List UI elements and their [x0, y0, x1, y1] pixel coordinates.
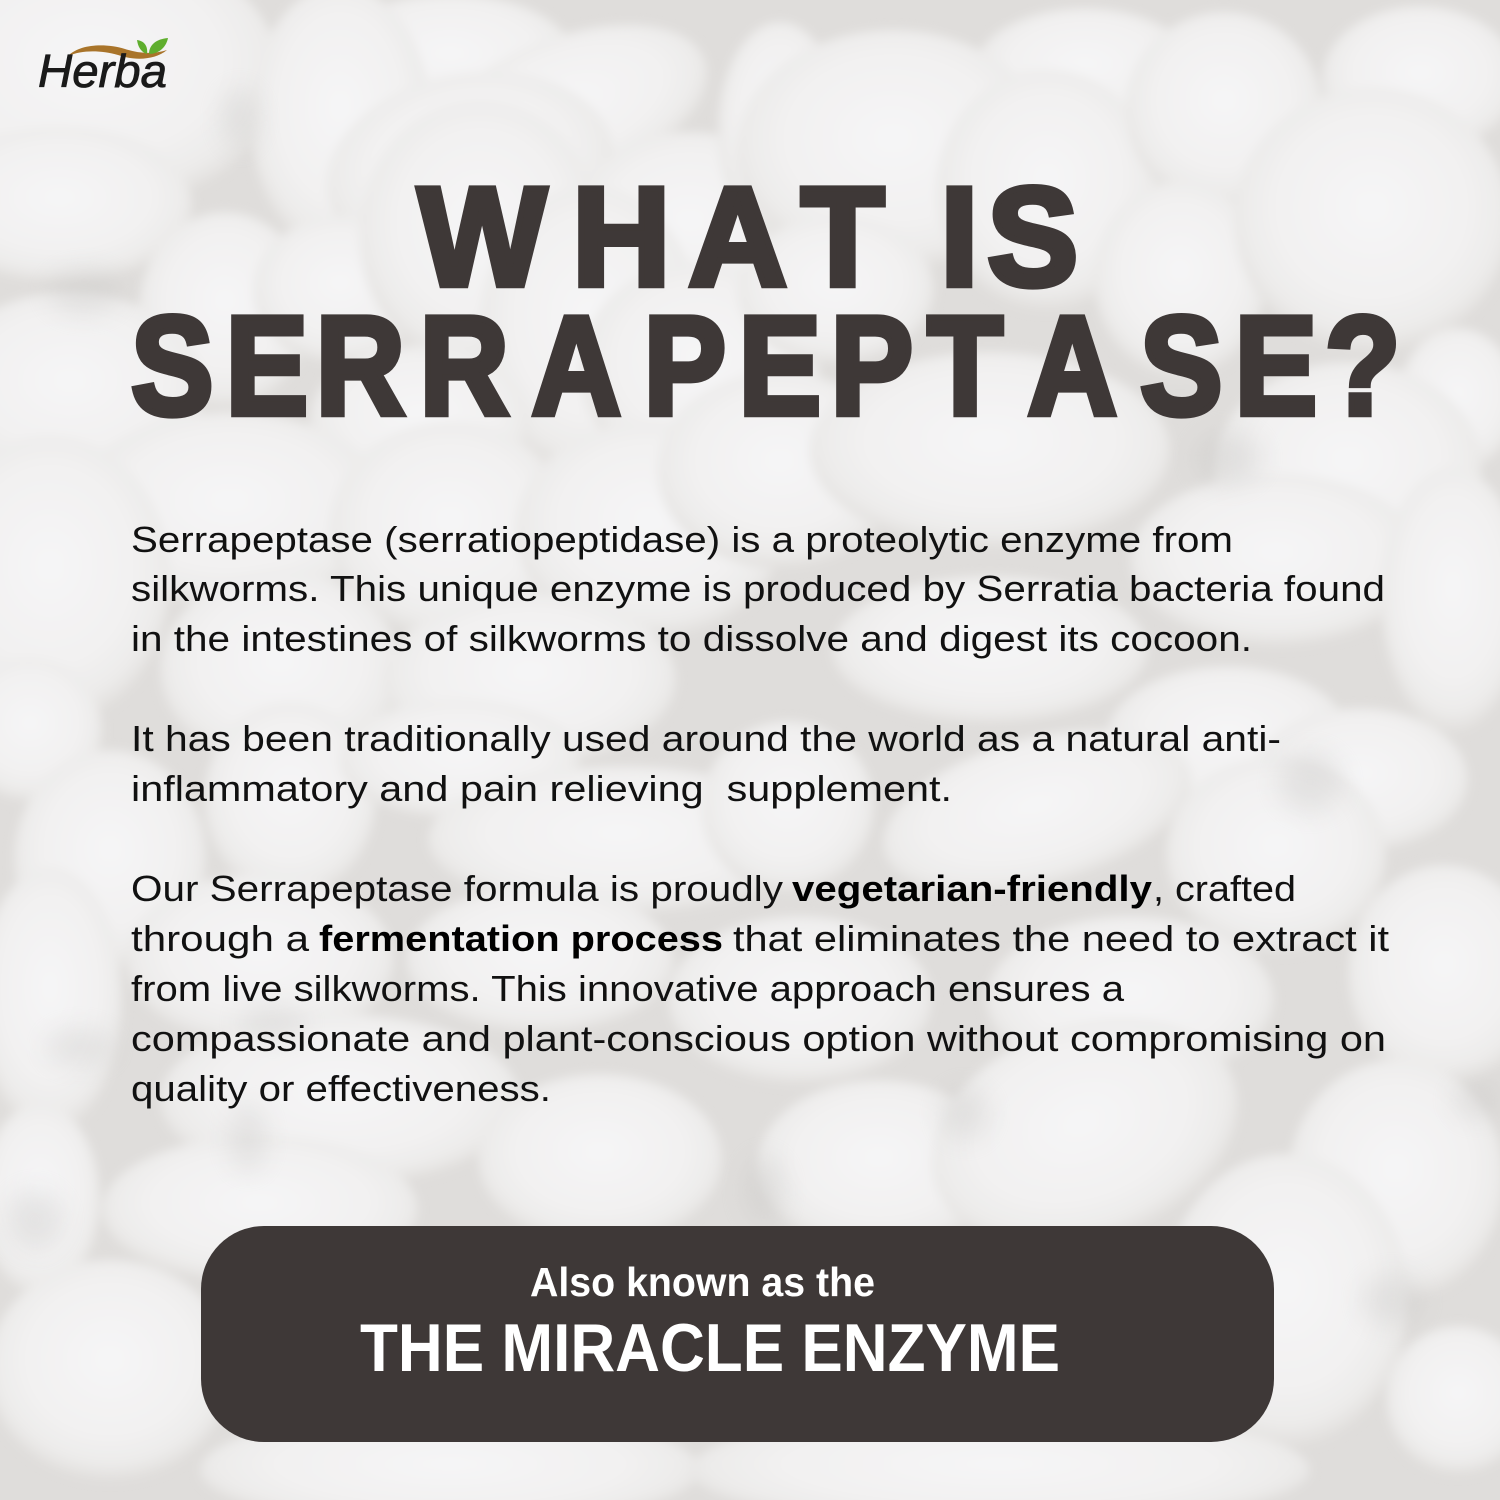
callout heading: THE MIRACLE ENZYME [360, 1310, 1060, 1386]
logo wordmark: Herba [38, 45, 167, 97]
text block: paragraph 3: from live silkworms. This innovative approach ensures a [131, 968, 1125, 1009]
text block: paragraph 3: through a [131, 918, 310, 959]
logo swoosh [68, 45, 167, 59]
text block: paragraph 3: Our Serrapeptase formula is proudly [131, 868, 783, 909]
text block: paragraph 1: Serrapeptase (serratiopeptidase) is a proteolytic enzyme from [131, 519, 1233, 560]
text block: paragraph 3 [131, 868, 1389, 1109]
text block: paragraph 1: in the intestines of silkworms to dissolve and digest its cocoon. [131, 618, 1252, 659]
text block: paragraph 3: compassionate and plant-conscious option without compromising on [131, 1018, 1386, 1059]
text block: paragraph 3: that eliminates the need to extract it [733, 918, 1389, 959]
text block: paragraph 2: inflammatory and pain relieving supplement. [131, 768, 952, 809]
text block: paragraph 1 [131, 519, 1385, 659]
callout background [201, 1226, 1274, 1442]
title: SERRAPEPTASE? [131, 288, 1400, 444]
title [131, 159, 1400, 444]
logo: Herba [38, 38, 168, 97]
callout subheading: Also known as the [530, 1259, 875, 1305]
text block: paragraph 3: vegetarian-friendly [792, 868, 1152, 909]
callout: the miracle enzyme [201, 1226, 1274, 1442]
text block: paragraph 2 [131, 718, 1281, 809]
text block: paragraph 3: quality or effectiveness. [131, 1068, 551, 1109]
text block: paragraph 2: It has been traditionally used around the world as a natural anti- [131, 718, 1281, 759]
text block: paragraph 3: , crafted [1153, 868, 1296, 909]
title: WHAT IS [418, 159, 1078, 315]
icon: green leaves [137, 38, 168, 54]
text block: paragraph 1: silkworms. This unique enzyme is produced by Serratia bacteria found [131, 568, 1385, 609]
text block: paragraph 3: fermentation process [319, 918, 723, 959]
